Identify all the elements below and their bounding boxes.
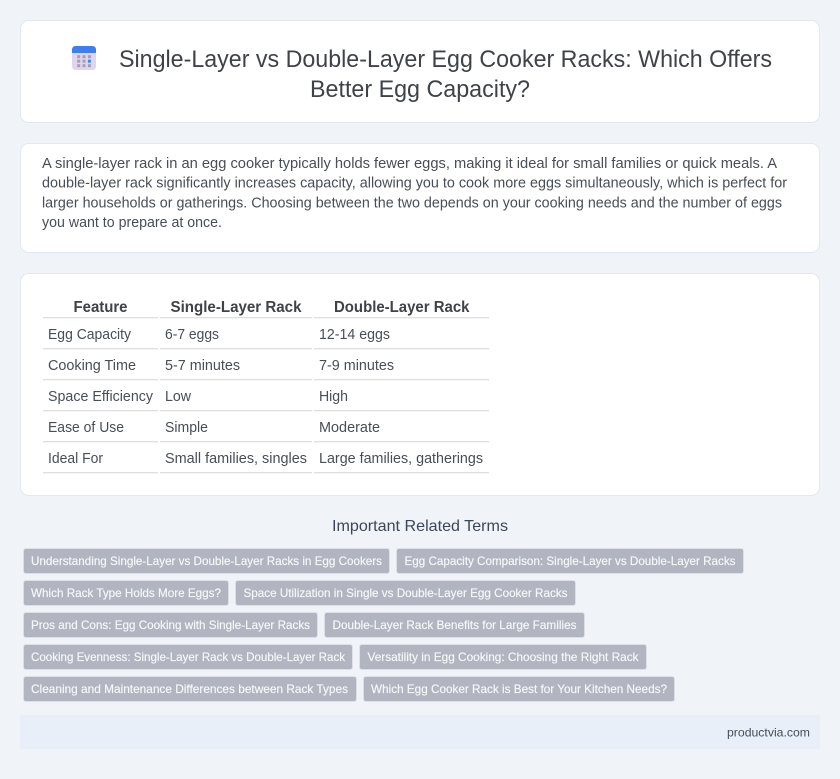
panel: summary paragraph: A single-layer rack in an egg cooker typically holds fewer eggs, making it ideal for small families or quick meals. A bbox=[42, 156, 777, 172]
table row: ease of use: Ease of Use bbox=[48, 420, 124, 436]
table header: Feature bbox=[74, 299, 128, 316]
tag bbox=[24, 676, 356, 702]
tag: Understanding Single-Layer vs Double-Layer Racks in Egg Cookers bbox=[31, 554, 382, 568]
footer bar: productvia.com bbox=[727, 726, 810, 740]
icon: calendar grid bbox=[72, 46, 96, 70]
table row: ease of use: Moderate bbox=[319, 420, 380, 436]
tag list: related terms bbox=[24, 548, 744, 702]
table row: egg capacity bbox=[43, 327, 489, 349]
panel: summary paragraph bbox=[20, 144, 820, 252]
panel: summary paragraph: double-layer rack significantly increases capacity, allowing you to cook more eggs simultaneously, which is perfect for bbox=[42, 176, 787, 192]
tag bbox=[24, 612, 318, 638]
panel: summary paragraph: larger households or gatherings. Choosing between the two depends on your cooking needs and the number of eggs bbox=[42, 195, 782, 211]
table row: cooking time bbox=[43, 358, 489, 380]
tag: Egg Capacity Comparison: Single-Layer vs Double-Layer Racks bbox=[404, 554, 736, 568]
table row: egg capacity: 6-7 eggs bbox=[165, 327, 219, 343]
tag: Versatility in Egg Cooking: Choosing the Right Rack bbox=[368, 650, 639, 664]
table row: space efficiency: High bbox=[319, 389, 348, 405]
heading: important related terms: Important Related Terms bbox=[332, 518, 508, 535]
table row: space efficiency: Low bbox=[165, 389, 192, 405]
title bbox=[119, 46, 772, 103]
table row: cooking time: 7-9 minutes bbox=[319, 358, 394, 374]
tag bbox=[24, 644, 352, 670]
tag: Cleaning and Maintenance Differences between Rack Types bbox=[31, 682, 348, 696]
tag: Cooking Evenness: Single-Layer Rack vs Double-Layer Rack bbox=[31, 650, 346, 664]
tag bbox=[236, 580, 576, 606]
tag: Which Rack Type Holds More Eggs? bbox=[31, 586, 221, 600]
panel: header bbox=[20, 20, 820, 122]
table row: cooking time: Cooking Time bbox=[48, 358, 136, 374]
table row: space efficiency: Space Efficiency bbox=[48, 389, 154, 405]
table row: cooking time: 5-7 minutes bbox=[165, 358, 240, 374]
panel: summary paragraph: you want to prepare at once. bbox=[42, 215, 222, 231]
table row: egg capacity: 12-14 eggs bbox=[319, 327, 390, 343]
table row: space efficiency bbox=[43, 389, 489, 411]
table row: ideal for: Large families, gatherings bbox=[319, 451, 483, 467]
tag bbox=[24, 580, 228, 606]
table row: ease of use bbox=[43, 420, 489, 442]
tag bbox=[364, 676, 674, 702]
tag bbox=[396, 548, 744, 574]
tag: Space Utilization in Single vs Double-Layer Egg Cooker Racks bbox=[244, 586, 568, 600]
table row: ideal for: Small families, singles bbox=[165, 451, 307, 467]
table header: Single-Layer Rack bbox=[170, 299, 302, 316]
tag: Double-Layer Rack Benefits for Large Families bbox=[332, 618, 576, 632]
table row: ideal for: Ideal For bbox=[48, 451, 103, 467]
title: Better Egg Capacity? bbox=[310, 76, 530, 103]
table header: Double-Layer Rack bbox=[334, 299, 470, 316]
title: Single-Layer vs Double-Layer Egg Cooker Racks: Which Offers bbox=[119, 46, 772, 73]
tag bbox=[360, 644, 646, 670]
table header bbox=[43, 299, 489, 318]
table row: ideal for bbox=[43, 451, 489, 473]
tag bbox=[24, 548, 390, 574]
table row: ease of use: Simple bbox=[165, 420, 208, 436]
footer bar bbox=[20, 715, 820, 749]
tag bbox=[324, 612, 584, 638]
tag: Pros and Cons: Egg Cooking with Single-Layer Racks bbox=[31, 618, 310, 632]
table row: egg capacity: Egg Capacity bbox=[48, 327, 132, 343]
tag: Which Egg Cooker Rack is Best for Your Kitchen Needs? bbox=[371, 682, 667, 696]
panel: comparison table bbox=[20, 274, 820, 496]
